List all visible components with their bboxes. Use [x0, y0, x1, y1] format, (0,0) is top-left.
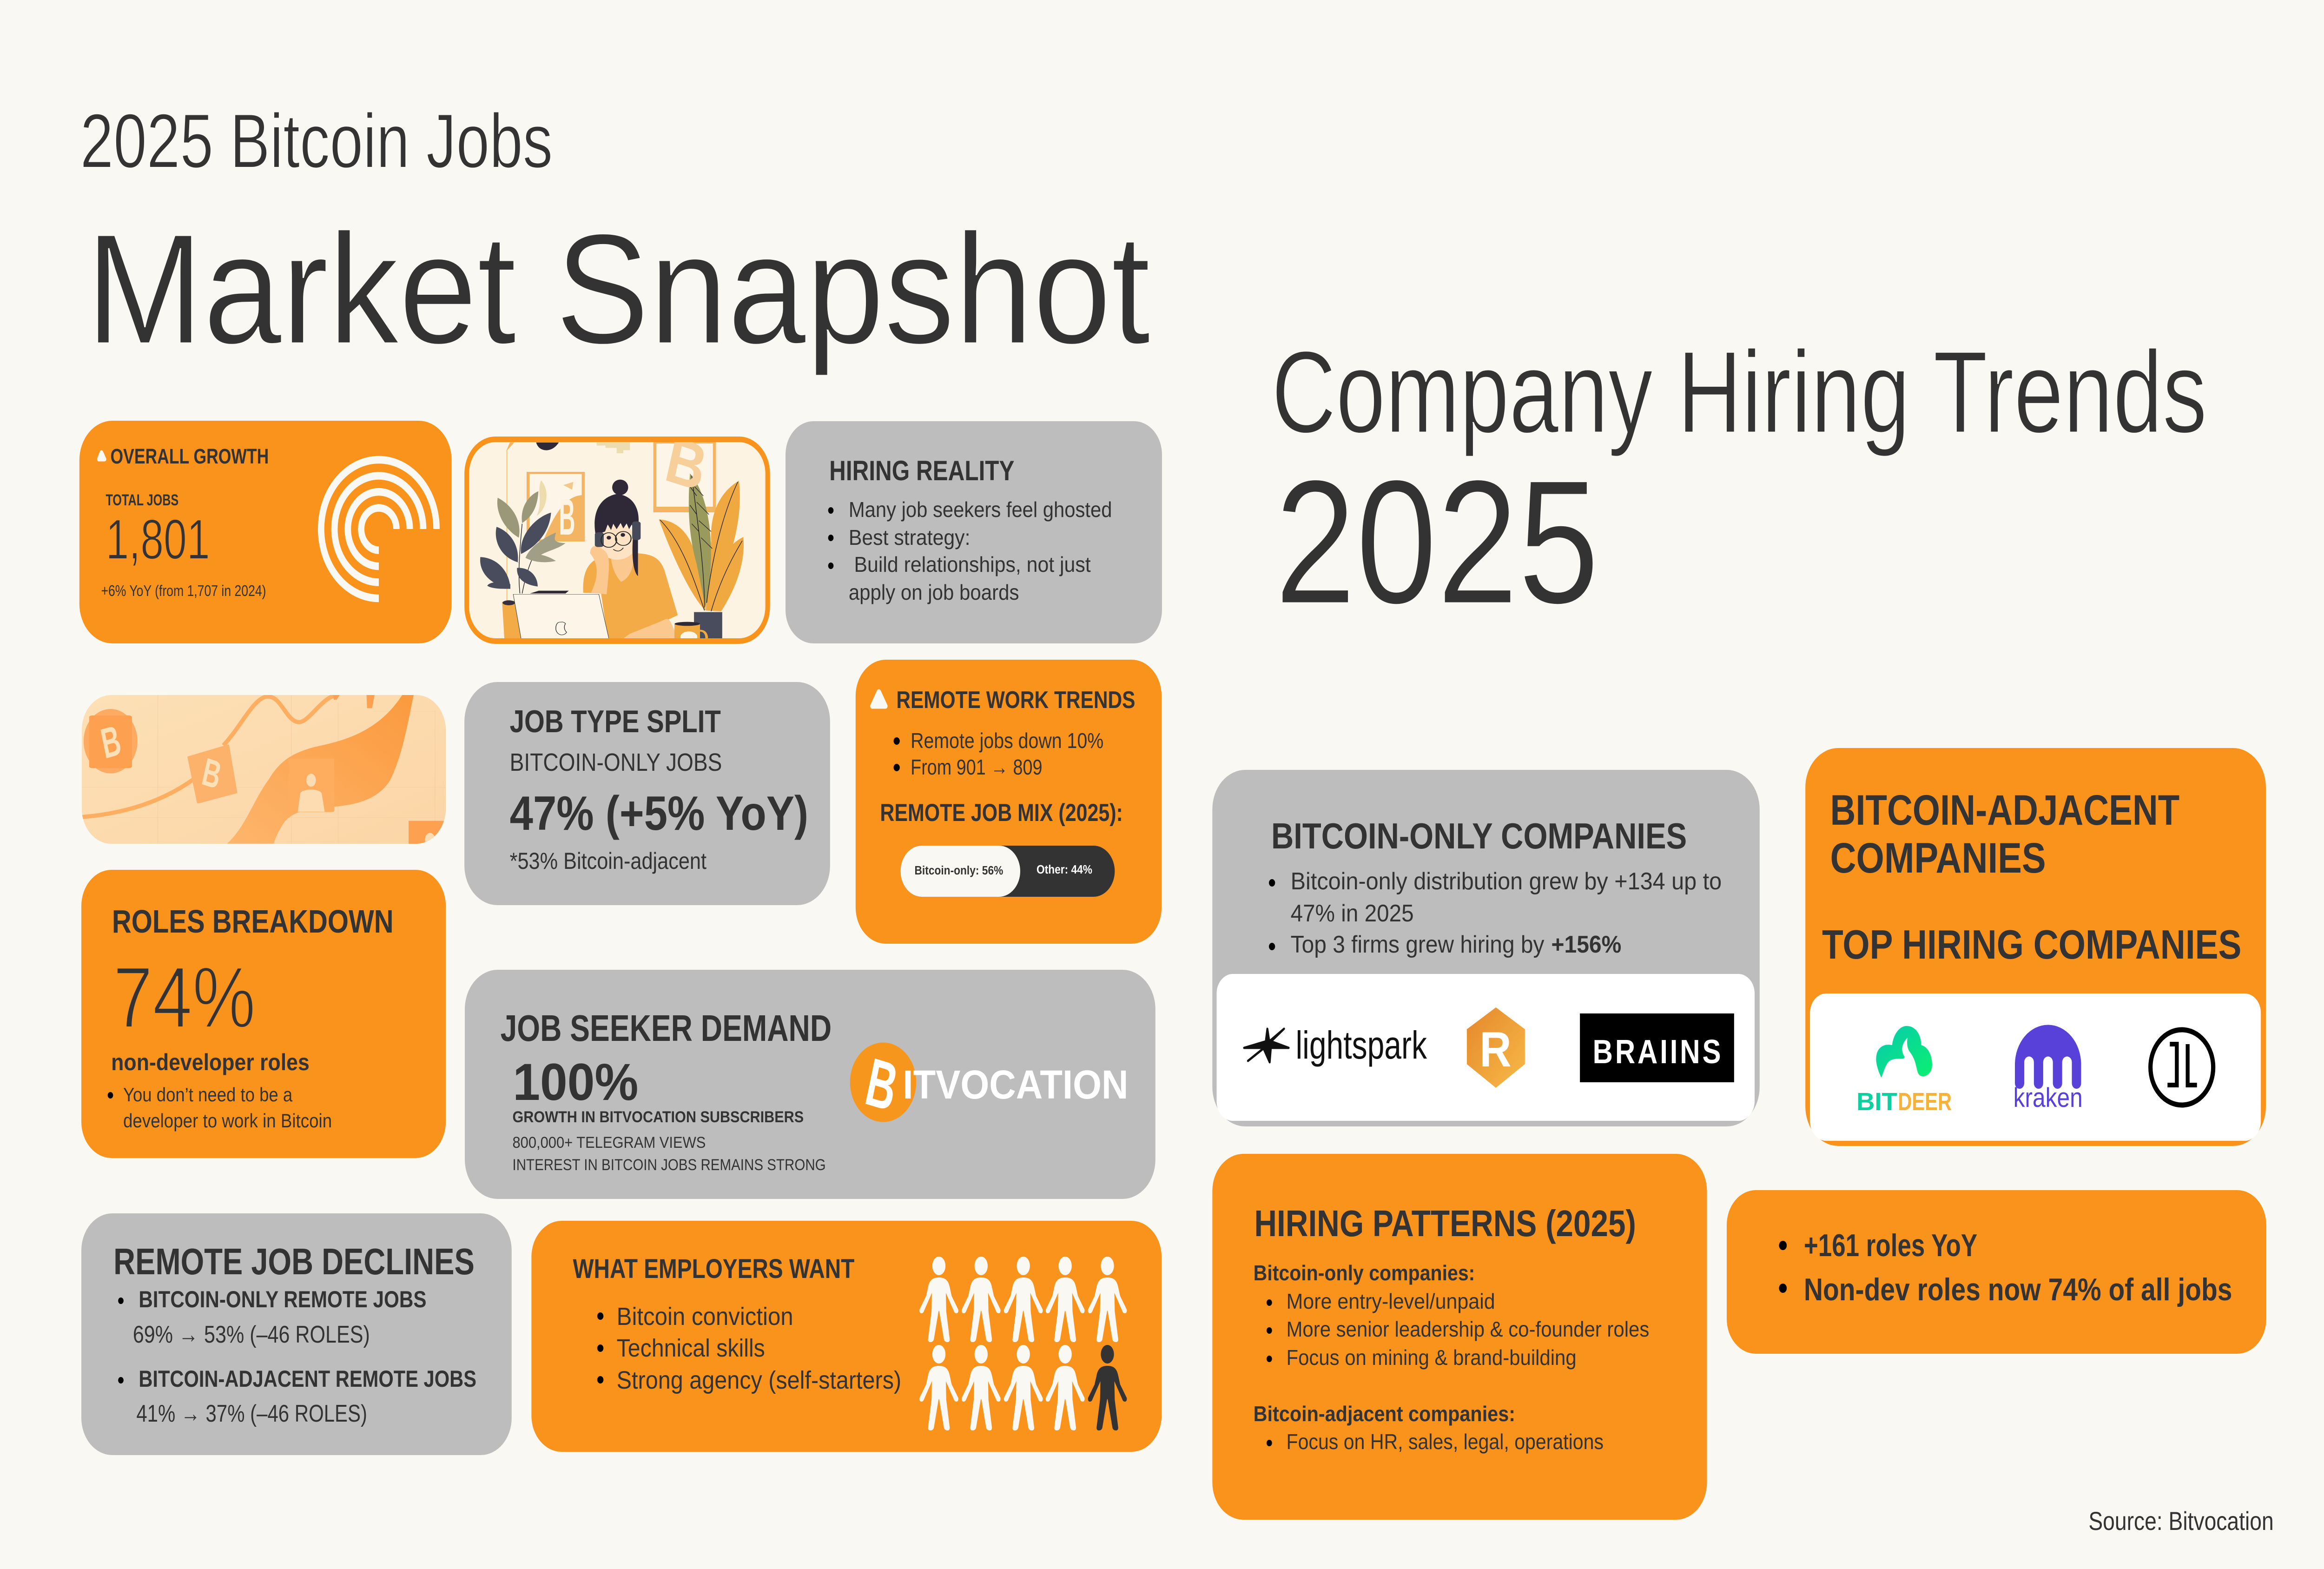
list: hiring reality bullets — [828, 498, 1112, 604]
list: bitcoin-only stats: Bitcoin-only distribution grew by +134 up to — [1291, 868, 1722, 895]
list: bitcoin-only patterns — [1254, 1261, 1649, 1370]
list: bitcoin-adjacent remote — [118, 1365, 476, 1427]
source note: Source: Bitvocation — [2088, 1506, 2274, 1536]
heading: what employers want: WHAT EMPLOYERS WANT — [573, 1254, 855, 1284]
heading: top hiring companies: TOP HIRING COMPANIES — [1822, 922, 2242, 968]
heading: remote work trends: REMOTE WORK TRENDS — [896, 687, 1136, 714]
logo: lightspark — [1244, 1024, 1427, 1067]
number: 47 percent: 47% (+5% YoY) — [510, 787, 808, 841]
subheading: bitcoin-only jobs: BITCOIN-ONLY JOBS — [510, 748, 722, 776]
heading: hiring patterns: HIRING PATTERNS (2025) — [1254, 1202, 1636, 1244]
list: employer wants: Bitcoin conviction — [617, 1302, 793, 1331]
list: hiring reality bullets: Best strategy: — [849, 526, 971, 549]
list: remote bullets: From 901 → 809 — [911, 755, 1043, 779]
logo: R hexagon — [1467, 1007, 1525, 1088]
panel: bitcoin-only logos — [1217, 974, 1755, 1121]
logo: R hexagon: R — [1479, 1021, 1512, 1077]
heading: bitcoin-adjacent companies: COMPANIES — [1830, 834, 2046, 882]
icon: bitcoin letters in wall art: B — [660, 423, 713, 505]
logo: bitvocation: B — [860, 1044, 904, 1126]
icon: bitcoin letters in wall art — [559, 423, 713, 546]
list: remote bullets: Remote jobs down 10% — [911, 729, 1103, 753]
chart: people pictogram 9 of 10 — [919, 1257, 1127, 1430]
list: remote bullets — [893, 729, 1103, 779]
list: bitcoin-only patterns: More senior leadership & co-founder roles — [1287, 1317, 1649, 1341]
heading: bitcoin-only companies: BITCOIN-ONLY COMPANIES — [1271, 816, 1687, 856]
logo: kraken: kraken — [2014, 1083, 2083, 1113]
list: employer wants: Strong agency (self-starters) — [617, 1366, 901, 1394]
list: roles note: developer to work in Bitcoin — [123, 1110, 332, 1132]
list: hiring reality bullets: Many job seekers feel ghosted — [849, 498, 1112, 522]
logo: braiins: BRAIINS — [1593, 1033, 1721, 1071]
caption: 53 percent adjacent: *53% Bitcoin-adjacent — [510, 847, 706, 874]
list: bitcoin-adjacent remote: 41% → 37% (–46 ROLES) — [136, 1400, 367, 1427]
text: non-dev roles: Non-dev roles now 74% of all jobs — [1804, 1272, 2232, 1307]
list: bitcoin-adjacent patterns: Bitcoin-adjacent companies: — [1254, 1402, 1515, 1426]
list: hiring reality bullets: Build relationships, not just — [854, 553, 1091, 576]
logo: bitvocation: ITVOCATION — [903, 1062, 1128, 1107]
heading: overall growth: OVERALL GROWTH — [111, 445, 269, 468]
caption: telegram views: 800,000+ TELEGRAM VIEWS — [513, 1134, 706, 1152]
illustration: bitcoin growth chart banner — [81, 695, 446, 847]
heading: hiring reality: HIRING REALITY — [829, 455, 1015, 486]
list: bitcoin-only stats: Top 3 firms grew hiring by — [1291, 931, 1545, 958]
caption: interest strong: INTEREST IN BITCOIN JOBS REMAINS STRONG — [513, 1156, 826, 1174]
caption: subscriber growth: GROWTH IN BITVOCATION SUBSCRIBERS — [513, 1108, 804, 1126]
panel: remote work trends — [856, 660, 1162, 944]
list: bitcoin-only stats: +156% — [1552, 931, 1621, 958]
title: 2025: 2025 — [1274, 444, 1599, 641]
icon: bitcoin coin letters: B — [97, 716, 125, 768]
list: bitcoin-adjacent remote: BITCOIN-ADJACENT REMOTE JOBS — [139, 1365, 476, 1392]
icon: bitcoin letters in wall art: B — [559, 489, 575, 546]
heading: job type split: JOB TYPE SPLIT — [510, 704, 721, 739]
list: roles note: You don’t need to be a — [123, 1084, 293, 1106]
list: bitcoin-adjacent patterns: Focus on HR, sales, legal, operations — [1287, 1430, 1604, 1454]
list: bitcoin-only patterns: Focus on mining & brand-building — [1287, 1346, 1577, 1370]
logo: pulse circle — [2151, 1030, 2213, 1105]
panel: hiring reality — [786, 421, 1162, 643]
list: bitcoin-only remote — [118, 1286, 426, 1348]
list: bitcoin-only stats — [1269, 868, 1722, 958]
text: +161 roles: +161 roles YoY — [1804, 1228, 1977, 1263]
panel: remote job declines — [81, 1213, 512, 1455]
logo: lightspark: lightspark — [1296, 1024, 1427, 1067]
subheading: non-developer roles: non-developer roles — [111, 1049, 310, 1075]
title: Market Snapshot: Market Snapshot — [86, 201, 1151, 377]
panel: hiring patterns — [1212, 1154, 1707, 1520]
logo: braiins — [1580, 1013, 1734, 1082]
panel: roles callout — [1727, 1190, 2266, 1354]
number: 74 percent: 74% — [113, 949, 256, 1046]
list: hiring reality bullets: apply on job boards — [849, 581, 1019, 604]
panel: job seeker demand — [465, 970, 1155, 1199]
logo: bitdeer — [1856, 1026, 1952, 1116]
icon: triangle bullet — [99, 452, 105, 459]
title: Company Hiring Trends: Company Hiring Trends — [1272, 327, 2207, 457]
heading: job seeker demand: JOB SEEKER DEMAND — [501, 1007, 832, 1049]
number: 1,801: 1,801 — [106, 507, 210, 571]
panel: overall growth — [79, 421, 452, 643]
logo: bitdeer: DEER — [1898, 1087, 1952, 1116]
panel: job type split — [464, 682, 830, 905]
list: bitcoin-adjacent patterns — [1254, 1402, 1604, 1454]
panel: roles breakdown — [81, 870, 446, 1158]
panel: adjacent logos — [1810, 993, 2261, 1141]
chart: remote mix pill — [901, 846, 1115, 897]
list: bitcoin-only patterns: More entry-level/unpaid — [1287, 1290, 1495, 1313]
logo: bitdeer: BIT — [1856, 1087, 1897, 1116]
heading: roles breakdown: ROLES BREAKDOWN — [112, 903, 394, 940]
panel: bitcoin-only companies — [1212, 770, 1760, 1126]
heading: remote job declines: REMOTE JOB DECLINES — [113, 1240, 475, 1282]
number: 100 percent: 100% — [513, 1053, 638, 1111]
panel: what employers want — [531, 1221, 1162, 1452]
chart: remote mix pill: Other: 44% — [1037, 863, 1092, 877]
heading: bitcoin-adjacent companies — [1830, 786, 2179, 882]
title: 2025 Bitcoin Jobs: 2025 Bitcoin Jobs — [80, 99, 553, 184]
list: roles note — [108, 1084, 332, 1132]
list: employer wants: Technical skills — [617, 1334, 765, 1362]
heading: remote job mix: REMOTE JOB MIX (2025): — [880, 799, 1123, 827]
list: bitcoin-only remote: 69% → 53% (–46 ROLES) — [133, 1321, 370, 1348]
chart: remote mix pill: Bitcoin-only: 56% — [915, 864, 1003, 878]
label: total jobs: TOTAL JOBS — [106, 491, 178, 509]
list: employer wants — [597, 1302, 901, 1394]
panel: bitcoin-adjacent companies — [1805, 748, 2266, 1146]
list: bitcoin-only patterns: Bitcoin-only companies: — [1254, 1261, 1475, 1285]
icon: bitcoin coin letters — [100, 727, 220, 788]
caption: yoy growth: +6% YoY (from 1,707 in 2024) — [101, 583, 266, 600]
heading: bitcoin-adjacent companies: BITCOIN-ADJACENT — [1830, 786, 2179, 834]
illustration: woman working on laptop with plants — [467, 423, 768, 642]
list: bitcoin-only stats: 47% in 2025 — [1291, 900, 1414, 927]
icon: triangle warning — [872, 692, 885, 706]
icon: bitcoin coin letters: B — [198, 750, 225, 798]
logo: kraken — [2014, 1025, 2083, 1113]
logo: bitvocation — [850, 1042, 1129, 1126]
list: bitcoin-only remote: BITCOIN-ONLY REMOTE JOBS — [139, 1286, 427, 1312]
icon: concentric arcs logo — [321, 460, 436, 598]
